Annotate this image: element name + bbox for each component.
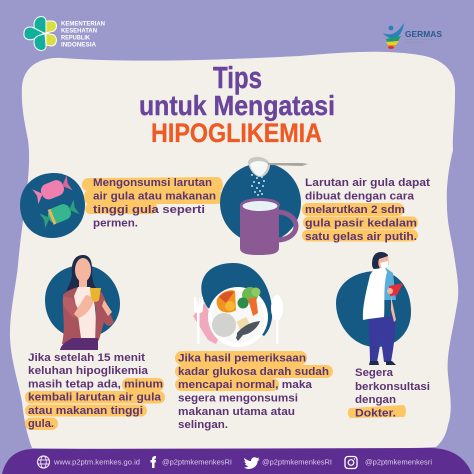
logo: GERMAS: GERMAS	[405, 29, 442, 39]
text block: step 2	[302, 177, 430, 243]
text block: step 5: Segera	[355, 367, 394, 379]
logo text: KEMENTERIAN	[61, 20, 105, 28]
icon: candies	[20, 173, 85, 238]
title: HIPOGLIKEMIA	[151, 118, 322, 148]
footer: facebook	[150, 456, 232, 468]
text block: step 5: berkonsultasi	[355, 381, 430, 393]
logo text: REPUBLIK	[61, 34, 90, 42]
footer: twitter	[244, 457, 332, 469]
logo text: KESEHATAN	[61, 28, 97, 34]
text block: step 1: permen.	[93, 218, 138, 230]
text block: step 4: Jika hasil pemeriksaan	[178, 352, 306, 364]
text block: step 4: mencapai normal, maka	[178, 379, 313, 391]
icon: woman with drink	[45, 255, 120, 350]
text block: step 1: Mengonsumsi larutan	[93, 177, 212, 189]
text block: step 1: air gula atau makanan	[93, 190, 216, 202]
logo: Kementerian Kesehatan	[24, 16, 105, 51]
logo: GERMAS	[383, 23, 442, 49]
text block: step 2: gula pasir kedalam	[305, 218, 417, 230]
text block: step 2: melarutkan 2 sdm	[305, 204, 405, 216]
title: Tips	[213, 60, 262, 95]
title	[139, 60, 335, 148]
text block: step 5: dengan	[355, 394, 396, 406]
text block: step 4	[175, 351, 333, 431]
footer bar	[2, 448, 472, 474]
icon: doctor	[336, 252, 411, 365]
footer: website: www.p2ptm.kemkes.go.id	[53, 458, 140, 466]
text block: step 1	[82, 177, 223, 230]
text block: step 2: Larutan air gula dapat	[305, 177, 430, 189]
title: untuk Mengatasi	[139, 90, 335, 121]
text block: step 4: kadar glukosa darah sudah	[178, 366, 329, 378]
text block: step 5	[348, 367, 430, 420]
text block: step 5: Dokter.	[355, 408, 396, 420]
footer: facebook: @p2ptmkemenkesRI	[162, 458, 232, 466]
text block: step 3: keluhan hipoglikemia	[28, 365, 149, 377]
footer: twitter: @p2ptmkemenkesRI	[262, 458, 332, 466]
icon: plate of food	[193, 263, 283, 347]
text block: step 3: masih tetap ada, minum	[28, 378, 163, 390]
footer: instagram	[345, 456, 432, 468]
footer: website	[38, 456, 140, 468]
text block: step 4: makanan utama atau	[178, 406, 295, 418]
text block: step 1: tinggi gula seperti	[93, 204, 205, 216]
text block: step 3: Jika setelah 15 menit	[28, 352, 145, 364]
text block: step 3: atau makanan tinggi	[28, 405, 143, 417]
footer: instagram: @p2ptmkemenkesri	[365, 458, 432, 466]
text block: step 3	[25, 352, 165, 430]
text block: step 3: kembali larutan air gula	[28, 392, 162, 404]
text block: step 3: gula.	[28, 418, 54, 430]
text block: step 4: selingan.	[178, 419, 228, 431]
text block: step 2: dibuat dengan cara	[305, 190, 415, 202]
text block: step 4: segera mengonsumsi	[178, 392, 298, 404]
icon: mug and sugar spoon	[220, 157, 308, 255]
logo text	[61, 20, 105, 48]
panel: paper card	[10, 52, 458, 449]
text block: step 2: satu gelas air putih.	[305, 231, 417, 243]
logo text: INDONESIA	[61, 42, 96, 48]
